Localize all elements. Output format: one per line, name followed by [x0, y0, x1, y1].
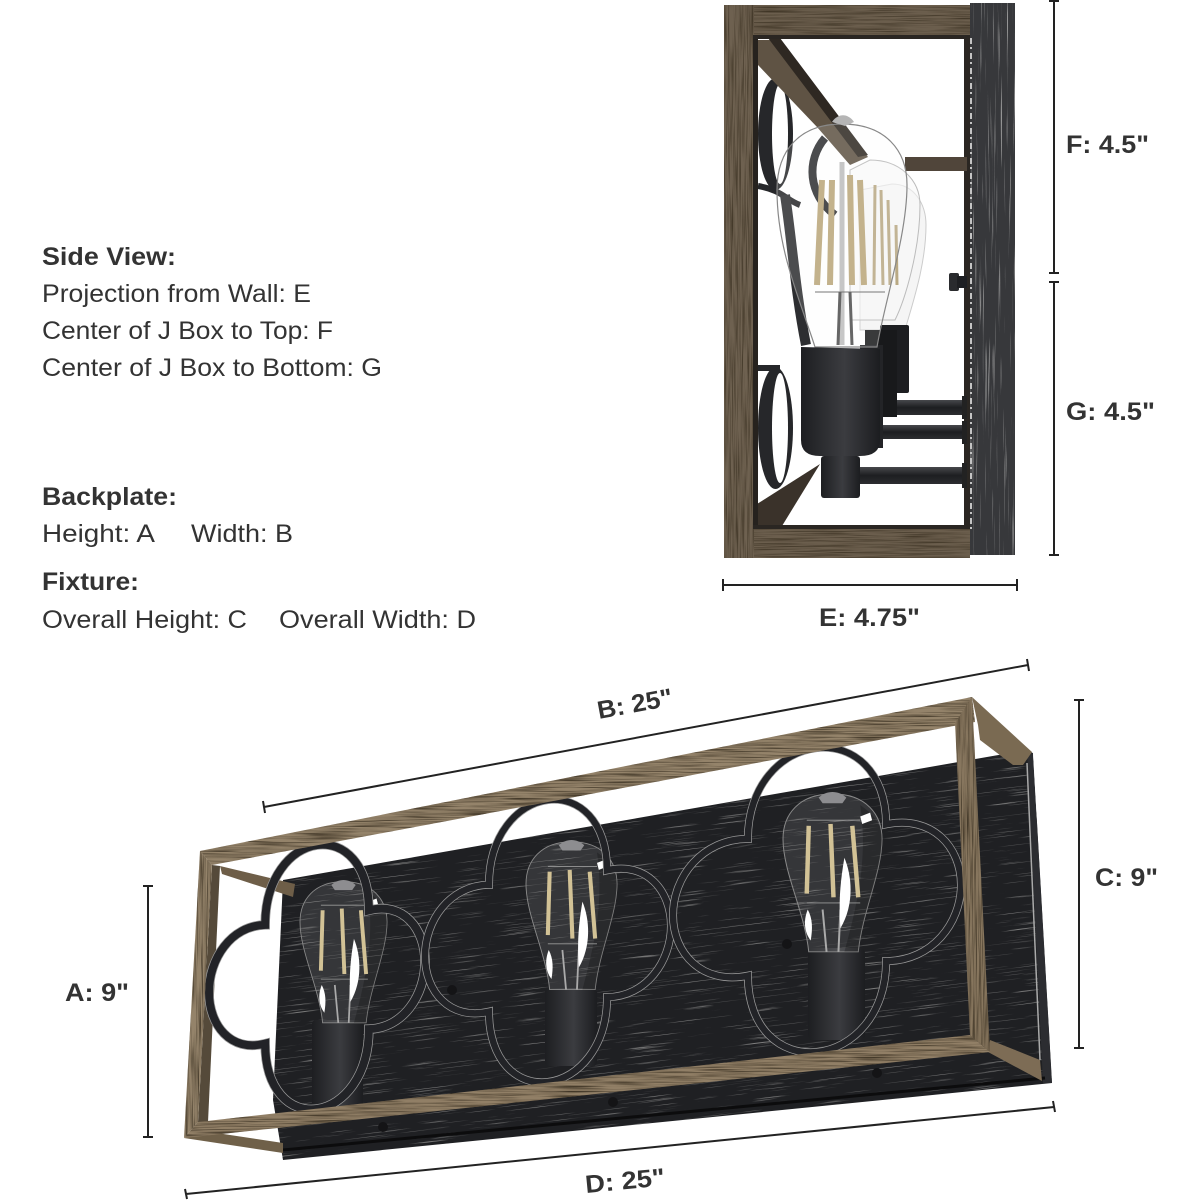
sockets [312, 948, 865, 1108]
dimension C [1074, 700, 1158, 1048]
heading: fixture: Fixture: [42, 568, 139, 596]
text block: fixture legend: Overall Width: D [279, 606, 476, 634]
dimension E [723, 579, 1017, 632]
bulb: left [300, 880, 387, 1023]
text block: side view legend [42, 243, 382, 382]
wall backplate side [970, 3, 1015, 555]
quatrefoil: left [209, 830, 425, 1124]
text block: side view legend: Center of J Box to Top: F [42, 317, 333, 345]
dimension C: C: 9" [1095, 864, 1158, 892]
back sockets [860, 325, 909, 448]
frame in wood finish [724, 5, 970, 558]
mounting bolts [378, 939, 882, 1132]
front view fixture illustration [184, 697, 1070, 1182]
dimension B: B: 25" [595, 684, 675, 725]
backplate [273, 752, 1052, 1160]
dimension D [185, 1101, 1055, 1199]
heading: side view: Side View: [42, 243, 176, 271]
quatrefoil: middle [425, 785, 671, 1097]
text block: backplate legend: Height: A [42, 520, 155, 548]
back bulbs [850, 160, 926, 330]
dimension G: G: 4.5" [1066, 398, 1155, 426]
dimension D: D: 25" [584, 1163, 666, 1199]
bulb: middle [526, 840, 617, 990]
dimension A [65, 886, 153, 1137]
heading: backplate: Backplate: [42, 483, 177, 511]
quatrefoil seen from side [758, 78, 835, 489]
rear frame post and strut [905, 38, 970, 526]
dimension F: F: 4.5" [1066, 131, 1149, 159]
text block: backplate legend [42, 483, 293, 548]
diagonal frame struts [753, 38, 868, 526]
front socket [801, 347, 880, 498]
text block: fixture legend [42, 568, 476, 634]
quatrefoil: right [673, 733, 961, 1067]
front bulb [777, 115, 907, 347]
rear frame pieces [184, 697, 1042, 1153]
text block: side view legend: Projection from Wall: E [42, 280, 311, 308]
text block: fixture legend: Overall Height: C [42, 606, 247, 634]
text block: backplate legend: Width: B [191, 520, 293, 548]
text block: side view legend: Center of J Box to Bottom: G [42, 354, 382, 382]
wall knob [949, 273, 967, 291]
dimension A: A: 9" [65, 979, 129, 1007]
bulb: right [783, 792, 882, 952]
dimension E: E: 4.75" [819, 604, 920, 632]
side view fixture illustration [724, 3, 1015, 558]
dimension B [263, 659, 1029, 813]
dimension F [1049, 0, 1149, 273]
dimension G [1049, 282, 1155, 555]
front frame in wood finish [184, 697, 990, 1138]
bulb arms [856, 396, 967, 488]
